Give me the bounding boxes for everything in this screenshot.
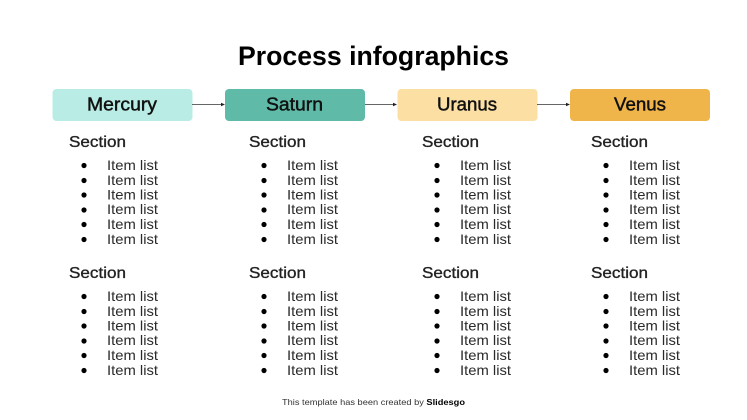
- item list: Item list: [107, 362, 158, 378]
- section heading: Section: [69, 134, 126, 151]
- section heading: Section: [69, 265, 126, 282]
- item list: Item list: [107, 216, 158, 232]
- process flow header: [52, 89, 710, 121]
- item list: Item list: [287, 172, 338, 188]
- item list: Item list: [107, 288, 158, 304]
- item list: Item list: [460, 288, 511, 304]
- item list: Item list: [629, 231, 680, 247]
- item list: [603, 288, 680, 378]
- section heading: Section: [591, 134, 648, 151]
- item list: Item list: [287, 318, 338, 334]
- item list: Item list: [287, 186, 338, 202]
- item list: Item list: [629, 216, 680, 232]
- step: Uranus: Uranus: [437, 94, 497, 114]
- column: Venus: [591, 134, 680, 378]
- column: Uranus: [422, 134, 511, 378]
- step: Saturn: Saturn: [266, 94, 323, 114]
- item list: Item list: [629, 186, 680, 202]
- item list: Item list: [460, 172, 511, 188]
- item list: Item list: [629, 362, 680, 378]
- item list: Item list: [107, 186, 158, 202]
- column: Saturn: [249, 134, 338, 378]
- item list: Item list: [629, 172, 680, 188]
- item list: Item list: [287, 157, 338, 173]
- section heading: Section: [249, 265, 306, 282]
- item list: Item list: [107, 231, 158, 247]
- item list: Item list: [107, 303, 158, 319]
- item list: [603, 157, 680, 247]
- item list: Item list: [107, 172, 158, 188]
- step: Uranus: [398, 89, 538, 121]
- column: Mercury: [69, 134, 158, 378]
- item list: Item list: [460, 186, 511, 202]
- step: Mercury: Mercury: [87, 94, 157, 114]
- item list: Item list: [629, 318, 680, 334]
- item list: Item list: [287, 216, 338, 232]
- section heading: Section: [422, 265, 479, 282]
- item list: Item list: [107, 201, 158, 217]
- item list: Item list: [460, 362, 511, 378]
- arrow: Saturn to Uranus: [365, 103, 397, 106]
- arrow: Uranus to Venus: [537, 103, 570, 106]
- item list: Item list: [629, 201, 680, 217]
- item list: Item list: [107, 318, 158, 334]
- item list: [261, 157, 338, 247]
- item list: Item list: [107, 347, 158, 363]
- item list: Item list: [629, 332, 680, 348]
- item list: Item list: [460, 216, 511, 232]
- item list: [434, 157, 511, 247]
- item list: Item list: [287, 332, 338, 348]
- item list: Item list: [107, 157, 158, 173]
- title: Process infographics: [238, 41, 509, 71]
- item list: Item list: [460, 347, 511, 363]
- item list: Item list: [107, 332, 158, 348]
- section heading: Section: [422, 134, 479, 151]
- item list: Item list: [460, 231, 511, 247]
- section heading: Section: [249, 134, 306, 151]
- item list: Item list: [287, 231, 338, 247]
- item list: Item list: [287, 201, 338, 217]
- footer credit: This template has been created by Slidesgo: [282, 397, 465, 407]
- item list: Item list: [629, 157, 680, 173]
- item list: Item list: [629, 288, 680, 304]
- step: Venus: [570, 89, 710, 121]
- item list: Item list: [287, 362, 338, 378]
- item list: Item list: [287, 347, 338, 363]
- step: Saturn: [225, 89, 365, 121]
- item list: Item list: [460, 318, 511, 334]
- item list: Item list: [287, 303, 338, 319]
- section heading: Section: [591, 265, 648, 282]
- item list: [434, 288, 511, 378]
- item list: [81, 157, 158, 247]
- item list: Item list: [460, 332, 511, 348]
- step: Venus: Venus: [614, 94, 666, 114]
- item list: Item list: [460, 157, 511, 173]
- step: Mercury: [52, 89, 192, 121]
- item list: Item list: [287, 288, 338, 304]
- item list: [81, 288, 158, 378]
- item list: Item list: [460, 201, 511, 217]
- item list: Item list: [460, 303, 511, 319]
- item list: Item list: [629, 347, 680, 363]
- item list: [261, 288, 338, 378]
- arrow: Mercury to Saturn: [192, 103, 225, 106]
- item list: Item list: [629, 303, 680, 319]
